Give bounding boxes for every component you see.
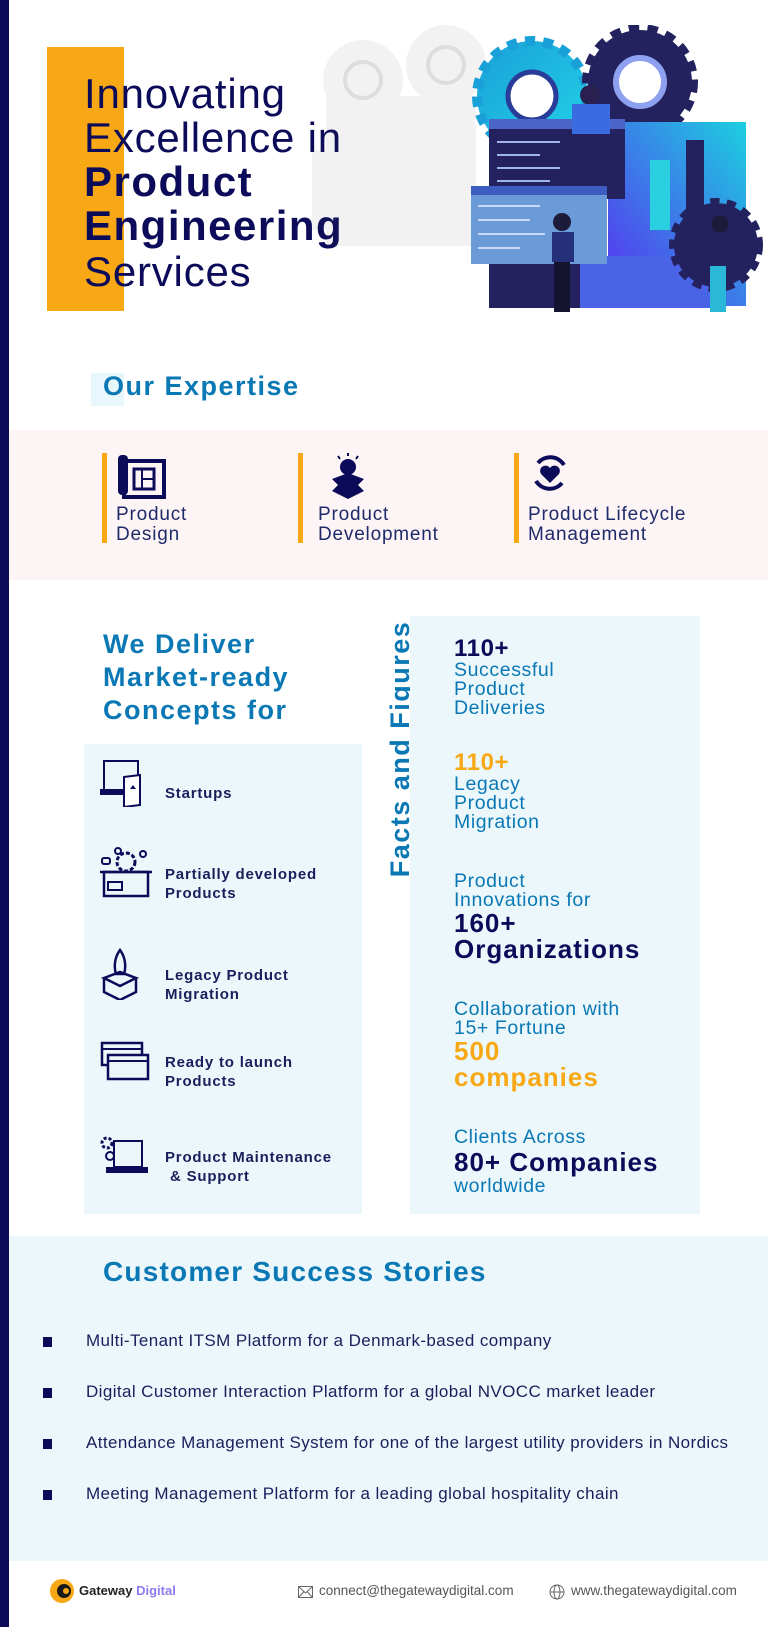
panel: expertise band: [9, 430, 768, 580]
fact: 110+ deliveries: Successful: [454, 659, 554, 681]
fact: 110+ deliveries: [454, 635, 554, 719]
list: success stories: Digital Customer Interaction Platform for a global NVOCC market leader: [86, 1382, 655, 1401]
expertise item: Product Lifecycle Management: Management: [528, 524, 647, 545]
list: success stories: [43, 1331, 728, 1503]
fact: 160+ organizations: Product: [454, 870, 525, 892]
fact: 160+ organizations: 160+: [454, 908, 517, 938]
expertise item: Product Development: [298, 453, 439, 545]
fact: 110+ legacy migration: Legacy: [454, 773, 520, 795]
fact: Fortune 500: 15+ Fortune: [454, 1017, 566, 1039]
title: Excellence in: [84, 114, 342, 161]
title: Innovating: [84, 70, 286, 117]
heading: Our Expertise: Our Expertise: [103, 371, 300, 401]
item: Legacy Product Migration: Legacy Product: [165, 967, 289, 984]
footer logo: [50, 1579, 176, 1603]
heading: We Deliver Market-ready Concepts for: Concepts for: [103, 695, 288, 725]
icon: lifecycle heart: [534, 455, 566, 491]
fact: 110+ deliveries: 110+: [454, 635, 509, 662]
expertise item: Product Lifecycle Management: Product Lifecycle: [528, 504, 686, 525]
fact: 110+ legacy migration: [454, 749, 540, 833]
hero illustration: [312, 25, 763, 312]
fact: 160+ organizations: [454, 870, 640, 964]
panel: customer success stories: [9, 1236, 768, 1561]
item: Ready to launch Products: [100, 1042, 293, 1090]
left navy edge bar: [0, 0, 9, 1627]
item: Product Maintenance & Support: [100, 1136, 332, 1185]
expertise item: Product Design: Design: [116, 524, 180, 545]
item: Legacy Product Migration: [101, 948, 289, 1003]
expertise item: Product Design: [102, 453, 187, 545]
expertise item: Product Lifecycle Management: [514, 453, 686, 545]
orange title accent: [47, 47, 124, 311]
list: success stories: Multi-Tenant ITSM Platform for a Denmark-based company: [86, 1331, 552, 1350]
panel: facts and figures: [410, 616, 700, 1214]
fact: 110+ legacy migration: 110+: [454, 749, 509, 776]
icon: laptop door: [100, 760, 141, 807]
fact: 160+ organizations: Innovations for: [454, 889, 591, 911]
icon: blueprint: [118, 455, 166, 499]
vertical heading: Facts and Figures: Facts and Figures: [385, 621, 415, 877]
item: Partially developed Products: Products: [165, 885, 236, 902]
item: Partially developed Products: Partially developed: [165, 866, 317, 883]
item: Product Maintenance & Support: Product Maintenance: [165, 1149, 332, 1166]
item: Partially developed Products: [100, 847, 317, 902]
title: Services: [84, 248, 251, 295]
icon: windows: [100, 1042, 150, 1080]
icon: laptop gears: [100, 1136, 148, 1173]
fact: Fortune 500: [454, 998, 620, 1092]
expertise item: Product Design: Product: [116, 504, 187, 525]
footer contact: website: www.thegatewaydigital.com: [571, 1583, 737, 1598]
heading: We Deliver Market-ready Concepts for: Market-ready: [103, 662, 289, 692]
fact: 110+ deliveries: Deliveries: [454, 697, 546, 719]
fact: 80+ companies: Clients Across: [454, 1126, 586, 1148]
list: success stories: Meeting Management Platform for a leading global hospitality chain: [86, 1484, 619, 1503]
fact: 80+ companies: 80+ Companies: [454, 1147, 658, 1177]
fact: 80+ companies: worldwide: [454, 1175, 546, 1197]
heading: We Deliver Market-ready Concepts for: [103, 629, 289, 725]
expertise item: Product Development: Product: [318, 504, 389, 525]
footer logo: Gateway Digital: [79, 1583, 176, 1598]
list: success stories: Attendance Management System for one of the largest utility providers in Nordics: [86, 1433, 728, 1452]
title: Product: [84, 158, 253, 205]
fact: Fortune 500: companies: [454, 1062, 599, 1092]
fact: 80+ companies: [454, 1126, 658, 1197]
item: Legacy Product Migration: Migration: [165, 986, 240, 1003]
fact: 110+ legacy migration: Migration: [454, 811, 540, 833]
expertise item: Product Development: Development: [318, 524, 439, 545]
fact: 110+ legacy migration: Product: [454, 792, 525, 814]
title: [84, 70, 343, 295]
item: Ready to launch Products: Products: [165, 1073, 236, 1090]
footer contact: email: connect@thegatewaydigital.com: [319, 1583, 514, 1598]
icon: gear box: [100, 847, 152, 898]
fact: 110+ deliveries: Product: [454, 678, 525, 700]
fact: Fortune 500: 500: [454, 1036, 500, 1066]
item: Product Maintenance & Support: & Support: [170, 1168, 250, 1185]
fact: Fortune 500: Collaboration with: [454, 998, 620, 1020]
icon: rocket box: [101, 948, 139, 1000]
item: Startups: Startups: [165, 785, 232, 802]
panel: market-ready concepts list: [84, 744, 362, 1214]
item: Startups: [100, 760, 232, 807]
heading: We Deliver Market-ready Concepts for: We Deliver: [103, 629, 256, 659]
heading: Customer Success Stories: Customer Success Stories: [103, 1256, 487, 1287]
icon: lightbulb box: [332, 453, 364, 499]
item: Ready to launch Products: Ready to launch: [165, 1054, 293, 1071]
title: Engineering: [84, 202, 343, 249]
fact: 160+ organizations: Organizations: [454, 934, 640, 964]
